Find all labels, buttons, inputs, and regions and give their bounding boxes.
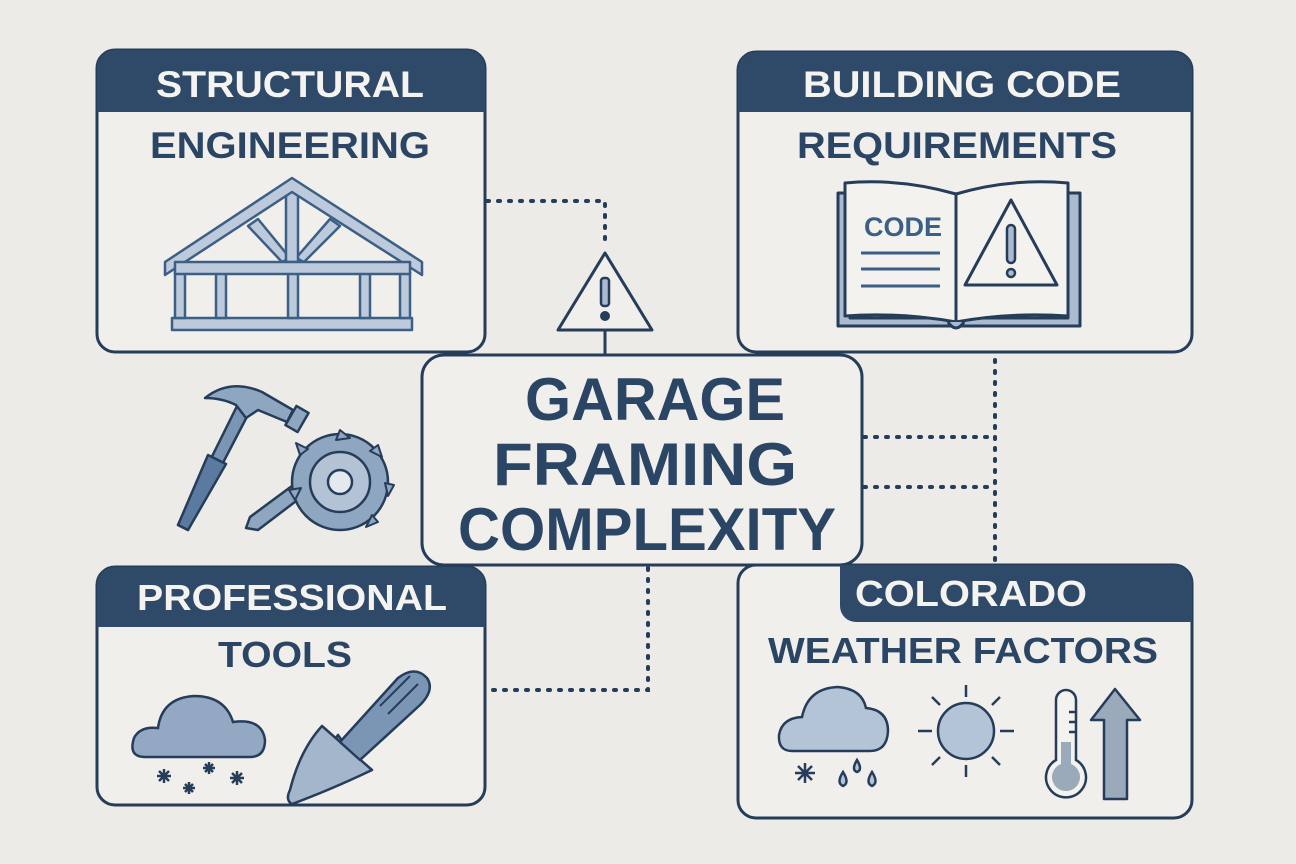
heading: structural: STRUCTURAL <box>156 64 424 105</box>
icon: up arrow <box>1091 689 1140 799</box>
center title box <box>422 355 862 565</box>
heading: colorado: COLORADO <box>855 573 1087 614</box>
icon: cloud with snow and rain <box>779 687 888 786</box>
subheading: requirements: REQUIREMENTS <box>797 125 1117 166</box>
connector: dotted lines <box>487 201 995 690</box>
heading: professional: PROFESSIONAL <box>137 577 447 618</box>
icon: code book: CODE <box>864 212 942 242</box>
center title box: COMPLEXITY <box>458 496 836 563</box>
panel: colorado weather factors <box>738 565 1192 818</box>
panel: professional tools <box>97 567 485 805</box>
icon: sun <box>918 685 1014 777</box>
subheading: engineering: ENGINEERING <box>150 125 430 166</box>
icon: hammer and saw <box>178 386 394 530</box>
icon: roof truss <box>165 178 422 330</box>
icon: trowel <box>288 672 430 804</box>
icon: code book <box>838 182 1080 328</box>
panel: building code requirements <box>738 52 1192 352</box>
subheading: weather factors: WEATHER FACTORS <box>768 630 1158 671</box>
icon: snow cloud <box>132 696 265 794</box>
center title box: GARAGE <box>525 366 785 433</box>
center title box: FRAMING <box>493 431 797 498</box>
icon: warning triangle <box>558 253 652 355</box>
heading: building code: BUILDING CODE <box>803 64 1121 105</box>
subheading: tools: TOOLS <box>218 634 352 675</box>
panel: structural engineering <box>97 50 485 352</box>
icon: thermometer <box>1046 690 1086 797</box>
